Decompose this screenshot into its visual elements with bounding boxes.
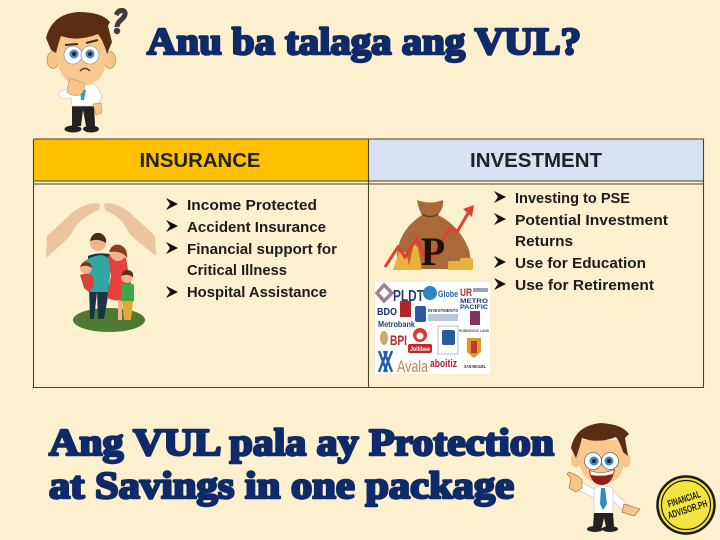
company logos panel — [375, 282, 490, 376]
list text: Potential Investment — [515, 212, 668, 229]
comparison table — [34, 139, 704, 388]
list: insurance benefits — [166, 197, 337, 301]
logo: Aboitiz: aboitiz — [430, 358, 457, 370]
list text: Hospital Assistance — [187, 284, 327, 301]
logo: Universal Robina — [460, 287, 489, 311]
header: insurance: INSURANCE — [140, 150, 260, 172]
header: investment — [368, 140, 704, 181]
bullet arrows — [494, 191, 506, 290]
icon: question mark — [116, 10, 125, 27]
list text — [515, 190, 668, 294]
bullet arrows — [166, 198, 178, 298]
closing statement: at Savings in one package — [49, 465, 514, 507]
closing statement — [49, 422, 554, 507]
list text: Financial support for — [187, 241, 337, 258]
logo: Universal Robina: UR — [460, 287, 472, 299]
icon: money bag with rising arrow: P — [421, 229, 445, 274]
logo: PLDT: PLDT — [393, 288, 424, 305]
logo: Robinsons Land: ROBINSONS LAND — [459, 329, 489, 333]
logo: Petron — [400, 301, 411, 317]
list text: Investing to PSE — [515, 190, 630, 207]
logo: Jollibee: Jollibee — [410, 347, 431, 353]
logo: BPI: BPI — [390, 332, 407, 348]
list text: Use for Education — [515, 255, 646, 272]
icon: happy man pointing — [567, 423, 640, 532]
logo: Financial Advisor PH badge: FINANCIAL — [666, 489, 702, 510]
logo: Ayala: Avala — [397, 357, 428, 376]
logo: Metrobank: Metrobank — [378, 319, 415, 329]
list text: Income Protected — [187, 197, 317, 214]
logo: BDO: BDO — [377, 306, 397, 318]
icon: family under protecting hands — [46, 203, 156, 332]
logo: Financial Advisor PH badge — [658, 476, 714, 534]
icon: money bag with rising arrow — [385, 200, 474, 274]
list text: Accident Insurance — [187, 219, 326, 236]
logo: San Miguel: SAN MIGUEL — [464, 364, 486, 369]
icon: thinking man with question mark — [46, 10, 125, 132]
logo: SM Investments: INVESTMENTS — [428, 308, 458, 313]
list text: Returns — [515, 233, 573, 250]
list text: Use for Retirement — [515, 277, 654, 294]
logo: SM — [438, 326, 458, 354]
list text: Critical Illness — [187, 262, 287, 279]
title: Anu ba talaga ang VUL? — [147, 21, 581, 63]
logo: Universal Robina: PACIFIC — [460, 305, 489, 311]
closing statement: Ang VUL pala ay Protection — [49, 422, 554, 464]
header: investment: INVESTMENT — [470, 150, 602, 172]
list text — [187, 197, 337, 301]
list: investment benefits — [494, 190, 668, 294]
logo: Globe: Globe — [438, 289, 458, 300]
header: insurance — [34, 140, 368, 181]
logo: Universal Robina: METRO — [460, 299, 488, 305]
